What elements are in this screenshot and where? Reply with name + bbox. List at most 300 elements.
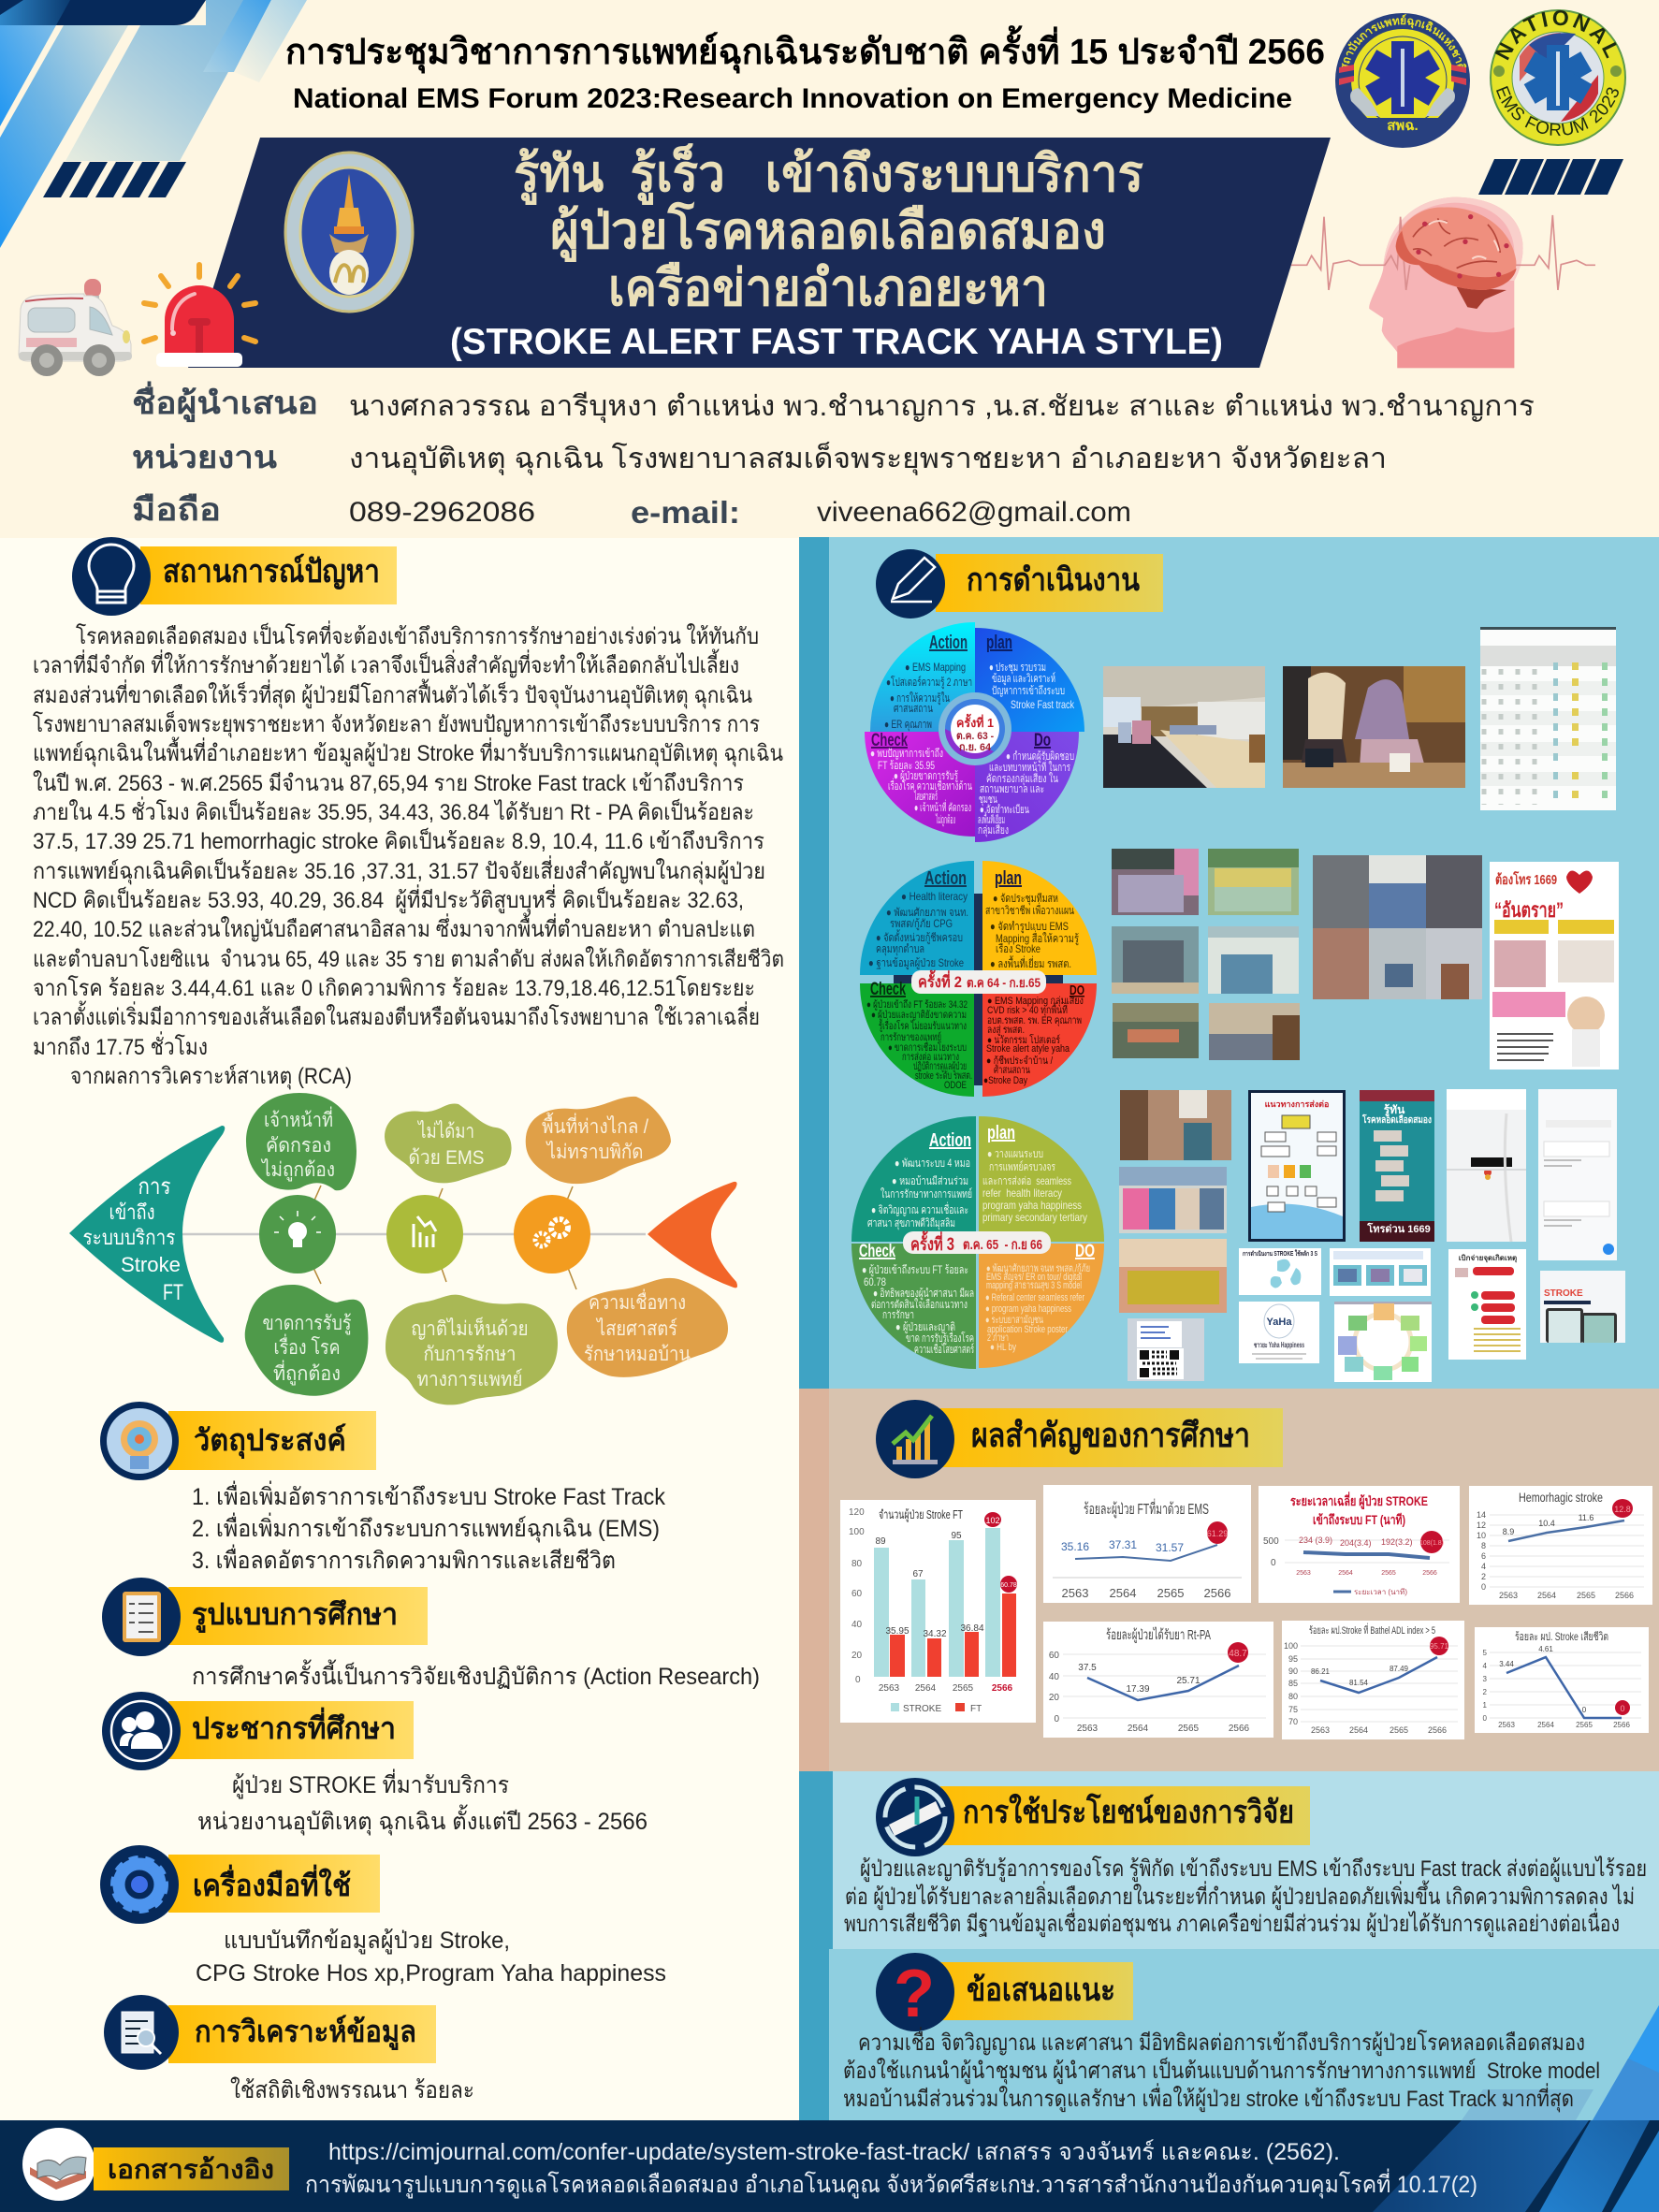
chart: percent FT via EMS: 2566 — [1204, 1586, 1230, 1600]
poster: hotline list: เบิกจ่ายจุดเกิดเหตุ — [1459, 1254, 1517, 1263]
panel: right column background — [799, 537, 1659, 2120]
fish head: FT — [163, 1280, 183, 1305]
Action quadrant text — [868, 868, 968, 970]
chart: hemorrhagic stroke: 8.9 — [1503, 1527, 1514, 1536]
Check quadrant text: ปฏิบัติการดูแลผู้ป่วย — [913, 1061, 967, 1072]
chart: Barthel ADL index: 70 — [1288, 1717, 1298, 1726]
chart: average time to FT: 2565 — [1381, 1570, 1396, 1577]
text block: situation paragraph: โรคหลอดเลือดสมอง เป็นโรคที่จะต้องเข้าถึงบริการการรักษาอย่างเร่งด่วน ให้ทันกับ — [76, 620, 759, 649]
chart: percent Rt-PA: 25.71 — [1176, 1676, 1201, 1686]
wheel center label: ครั้งที่ 3 — [910, 1230, 954, 1255]
Check quadrant text: การส่งต่อ แนวทาง — [902, 1052, 959, 1063]
chart: average time to FT: 192(3.2) — [1381, 1537, 1413, 1547]
node: light bulb — [259, 1195, 336, 1273]
Action quadrant text: ● ER คุณภาพ — [884, 718, 932, 732]
Check quadrant text: ไม่ถูกต้อง — [936, 813, 955, 827]
card: Yaha happiness: YaHa — [1267, 1317, 1292, 1328]
Plan quadrant text: ข้อมูล และวิเคราะห์ — [992, 672, 1055, 686]
Check quadrant text: ● ผู้ป่วยขาดการรับรู้ — [894, 769, 958, 783]
cause: remote area — [526, 1097, 671, 1184]
title banner — [188, 138, 1331, 368]
screenshot: map — [1447, 1089, 1526, 1242]
chart: stroke FT patient bars: 2563 — [879, 1683, 900, 1694]
Check quadrant text: รู้เรื่องโรค ไม่ยอมรับแนวทาง — [879, 1018, 967, 1032]
DO quadrant text: ● พัฒนาศักยภาพ จนท รพสต./กู้ภัย — [986, 1263, 1090, 1274]
DO quadrant text: ● program yaha happiness — [985, 1303, 1071, 1315]
DO quadrant text: CVD risk > 40 ทุกพื้นที่ — [987, 1002, 1068, 1016]
text block: situation paragraph — [33, 620, 784, 1090]
DO quadrant text: อบต.รพสต. รพ. ER คุณภาพ — [987, 1015, 1082, 1026]
cause: relatives disagree: กับการรักษา — [423, 1344, 517, 1365]
banner title line 3: เครือข่ายอำเภอยะหา — [608, 260, 1048, 316]
Action quadrant text: ● พัฒนศักยภาพ จนท. — [886, 906, 968, 919]
DO quadrant text: ● HL by — [990, 1342, 1016, 1353]
Plan quadrant text: refer health literacy — [982, 1186, 1062, 1200]
cause: lack of awareness: ขาดการรับรู้ — [262, 1313, 352, 1335]
cause: relatives disagree: ทางการแพทย์ — [417, 1368, 522, 1390]
chart: Barthel ADL index: 81.54 — [1349, 1679, 1369, 1687]
Action quadrant text: ●โปสเตอร์ความรู้ 2 ภาษา — [886, 676, 972, 690]
photo: meeting room — [1103, 666, 1265, 788]
chart: stroke FT patient bars: 2565 — [953, 1683, 974, 1694]
fish head — [69, 1126, 225, 1343]
section: tools heading: เครื่องมือที่ใช้ — [193, 1864, 351, 1902]
Check quadrant text: ต่อการตัดสินใจเลือกแนวทาง — [871, 1298, 968, 1311]
chart: percent FT via EMS: 61.29 — [1207, 1529, 1228, 1538]
section: recommendations heading: ข้อเสนอแนะ — [967, 1972, 1115, 2008]
cause: lack of awareness — [245, 1285, 368, 1396]
banner title English: (STROKE ALERT FAST TRACK YAHA STYLE) — [450, 322, 1223, 362]
chart: stroke FT patient bars: 2566 — [992, 1683, 1013, 1694]
photo grid: round 2 activities — [1112, 849, 1300, 1060]
text block: situation paragraph: ในปี พ.ศ. 2563 - พ.ศ.2565 มีจำนวน 87,65,94 ราย Stroke Fast track เข้าถึงบริการ — [33, 770, 744, 796]
chart: hemorrhagic stroke: 4 — [1481, 1562, 1486, 1571]
chart: average time to FT: 2563 — [1296, 1570, 1311, 1577]
Plan quadrant text — [986, 633, 1075, 711]
chart: average time to FT: ระยะเวลา (นาที) — [1354, 1588, 1407, 1596]
Plan quadrant text: primary secondary tertiary — [982, 1211, 1087, 1224]
chart: percent FT via EMS: 2564 — [1110, 1586, 1136, 1600]
chart: Barthel ADL index: 75 — [1288, 1705, 1298, 1714]
text block: population: หน่วยงานอุบัติเหตุ ฉุกเฉิน ตั้งแต่ปี 2563 - 2566 — [197, 1804, 648, 1836]
chart: stroke mortality — [1475, 1627, 1649, 1733]
text block: situation paragraph: และตำบลบาโงยซิแน จำนวน 65, 49 และ 35 ราย ตามลำดับ ส่งผลให้เกิดอัตราการเสียชีวิต — [33, 946, 784, 972]
infographic: 3S model: การดำเนินงาน STROKE ใช้หลัก 3 S — [1243, 1249, 1317, 1258]
chart: hemorrhagic stroke: 6 — [1481, 1551, 1486, 1561]
Check quadrant text: Check — [859, 1242, 895, 1261]
chart: percent Rt-PA: 48.7 — [1229, 1649, 1247, 1659]
icon: EMS forum 2023 logo — [1490, 9, 1626, 146]
chart: average time to FT: 0 — [1271, 1558, 1276, 1568]
text block: population — [197, 1768, 648, 1836]
Action quadrant text: ● การให้ความรู้ใน — [890, 691, 950, 706]
text block: situation paragraph: ภายใน 4.5 ชั่วโมง คิดเป็นร้อยละ 35.95, 34.43, 36.84 ได้รับยา Rt - PA คิดเป็นร้อยละ — [33, 796, 754, 825]
chart: hemorrhagic stroke: 11.6 — [1579, 1513, 1594, 1522]
section: population heading: ประชากรที่ศึกษา — [192, 1707, 396, 1745]
chart: stroke FT patient bars: 0 — [855, 1675, 861, 1685]
Do quadrant text: กลุ่มเสี่ยง — [978, 822, 1009, 837]
text block: situation paragraph: จากผลการวิเคราะห์สาเหตุ (RCA) — [70, 1063, 352, 1090]
text block: situation paragraph: สมองส่วนที่ขาดเลือดให้เร็วที่สุด ผู้ป่วยมีโอกาสฟื้นตัวได้เร็ว ปัจจุบันงานอุบัติเหตุ ฉุกเฉิน — [33, 678, 752, 709]
chart: percent FT via EMS — [1043, 1485, 1251, 1603]
Do quadrant text: คัดกรองกลุ่มเสี่ยง ใน — [986, 770, 1058, 786]
Action quadrant text: ● จัดตั้งหน่วยกู้ชีพครอบ — [876, 929, 963, 945]
Check quadrant text — [866, 980, 972, 1091]
chart: average time to FT: 108(1.8) — [1419, 1540, 1444, 1547]
chart: stroke FT patient bars — [840, 1500, 1036, 1723]
chart: stroke FT patient bars: 36.84 — [960, 1623, 984, 1634]
section: research utilization heading: การใช้ประโยชน์ของการวิจัย — [963, 1793, 1294, 1830]
section: objectives heading: วัตถุประสงค์ — [194, 1423, 346, 1460]
chart: stroke mortality: 4.61 — [1538, 1645, 1553, 1653]
chart: Barthel ADL index: 100 — [1284, 1641, 1298, 1651]
chart: stroke mortality: 5 — [1483, 1649, 1488, 1657]
chart: stroke mortality: 2 — [1483, 1688, 1488, 1696]
Check quadrant text — [870, 731, 972, 827]
text block: situation paragraph: แพทย์ฉุกเฉินในพื้นที่อำเภอยะหา ข้อมูลผู้ป่วย Stroke ที่มารับบริการแผนกอุบัติเหตุ ฉุกเฉิน — [33, 736, 783, 767]
chart: percent Rt-PA: 2566 — [1229, 1724, 1250, 1734]
DO quadrant text: Stroke alert atyle yaha — [986, 1043, 1070, 1055]
DO quadrant text: EMS สัญจร/ ER on tour/ digital — [986, 1272, 1082, 1283]
chart: average time to FT: 2564 — [1338, 1570, 1353, 1577]
DO quadrant text: ● ระบบยาสามัญชน — [985, 1315, 1043, 1326]
text block: population: ผู้ป่วย STROKE ที่มารับบริการ — [232, 1768, 509, 1799]
chart: hemorrhagic stroke: 2566 — [1615, 1591, 1634, 1600]
Check quadrant text: ● อิทธิพลของผู้นำศาสนา มีผล — [873, 1287, 974, 1301]
cause: staff triage: ไม่ถูกต้อง — [260, 1158, 335, 1182]
icon: red siren — [144, 265, 255, 367]
DO quadrant text: 2 ภาษา — [987, 1332, 1009, 1344]
unit value: งานอุบัติเหตุ ฉุกเฉิน โรงพยาบาลสมเด็จพระยุพราชยะหา อำเภอยะหา จังหวัดยะลา — [349, 441, 1387, 476]
fish tail — [648, 1182, 737, 1288]
email value: viveena662@gmail.com — [817, 497, 1131, 528]
chart: stroke FT patient bars: 34.32 — [923, 1629, 947, 1639]
Check quadrant text: 60.78 — [864, 1275, 886, 1288]
text block: objectives list — [192, 1480, 665, 1574]
section: key results heading: ผลสำคัญของการศึกษา — [971, 1416, 1250, 1455]
card: Yaha happiness: ชาวยะ Yaha Happiness — [1254, 1341, 1304, 1349]
Check quadrant text: ODOE — [944, 1080, 967, 1091]
wheel center label: ต.ค. 65 - ก.ย 66 — [963, 1237, 1042, 1253]
Do quadrant text: และบทบาทหน้าที่ ในการ — [989, 759, 1070, 774]
photo: health screening — [1283, 666, 1465, 788]
chart: hemorrhagic stroke: 10.4 — [1538, 1519, 1555, 1528]
Check quadrant text: ● พบปัญหาการเข้าถึง — [870, 747, 943, 760]
text block: tools: แบบบันทึกข้อมูลผู้ป่วย Stroke, — [224, 1928, 510, 1955]
poster: stroke awareness — [1360, 1090, 1434, 1242]
DO quadrant text: ● กู้ชีพประจำบ้าน / — [986, 1055, 1054, 1067]
section: methods heading: การดำเนินงาน — [967, 562, 1140, 598]
decoration: left hatch — [43, 162, 186, 197]
Action quadrant text: ● พัฒนาระบบ 4 หมอ — [895, 1157, 970, 1170]
text block: situation paragraph: 37.5, 17.39 25.71 hemorrhagic stroke คิดเป็นร้อยละ 8.9, 10.4, 11.6 เข้าถึงบริการ — [33, 827, 764, 854]
DO quadrant text: ศาสนสถาน — [994, 1065, 1030, 1076]
poster: stroke awareness: รู้ทัน — [1384, 1103, 1405, 1117]
wheel center label: ต.ค 64 - ก.ย.65 — [967, 975, 1041, 990]
cause: relatives disagree — [386, 1295, 558, 1404]
Plan quadrant text: ปัญหาการเข้าถึงระบบ — [992, 684, 1065, 697]
DO quadrant text: ลงสู่ รพสต. — [987, 1025, 1025, 1036]
chart: Barthel ADL index: 2565 — [1390, 1725, 1408, 1735]
Check quadrant text — [859, 1242, 974, 1356]
Plan quadrant text — [985, 868, 1079, 970]
node: chart — [386, 1195, 463, 1273]
chart: stroke FT patient bars: 95 — [951, 1531, 962, 1541]
chart: PDCA wheel round 1 — [865, 622, 1084, 842]
DO quadrant text: mapping สาธารณสุข 3 S model — [986, 1280, 1082, 1291]
cause: remote area: พื้นที่ห่างไกล / — [542, 1113, 648, 1138]
chart: hemorrhagic stroke: 12 — [1477, 1521, 1486, 1530]
chart: stroke FT patient bars: 67 — [912, 1569, 924, 1579]
conference title English: National EMS Forum 2023:Research Innovation on Emergency Medicine — [293, 83, 1292, 114]
section: situation heading — [72, 537, 397, 616]
Plan quadrant text: ● ลงพื้นที่เยี่ยม รพสต. — [990, 955, 1071, 970]
chart: percent Rt-PA: 0 — [1054, 1714, 1059, 1724]
text block: situation paragraph: จากโรค ร้อยละ 3.44,4.61 และ 0 เกิดความพิการ ร้อยละ 13.79,18.46,12.51โดยระยะ — [33, 975, 755, 1001]
chart: percent FT via EMS: ร้อยละผู้ป่วย FTที่มาด้วย EMS — [1084, 1498, 1209, 1519]
screenshot: computers — [1330, 1248, 1431, 1296]
section: research utilization heading — [876, 1778, 1310, 1856]
Action quadrant text: ● จิตวิญญาณ ความเชื่อและ — [871, 1201, 968, 1216]
Action quadrant text: ● ฐานข้อมูลผู้ป่วย Stroke — [868, 956, 964, 970]
Action quadrant text: ● หมอบ้านมีส่วนร่วม — [892, 1174, 968, 1187]
DO quadrant text: ● Referal center seamless refer — [985, 1292, 1084, 1303]
Action quadrant text: Action — [929, 1130, 971, 1151]
references heading — [94, 2147, 289, 2190]
cause: beliefs: ไสยศาสตร์ — [595, 1317, 677, 1340]
chart: Barthel ADL index: ร้อยละ ผป.Stroke ที่ Bathel ADL index > 5 — [1309, 1623, 1435, 1637]
mobile label: มือถือ — [132, 492, 221, 527]
chart: Barthel ADL index: 2564 — [1349, 1725, 1368, 1735]
Check quadrant text: ● ผู้ป่วยและญาติ — [895, 1320, 955, 1334]
Check quadrant text: ● ผู้ป่วยเข้าถึง FT ร้อยละ 34.32 — [866, 999, 968, 1011]
fishbone spine — [182, 1233, 646, 1235]
chart: percent FT via EMS: 31.57 — [1156, 1541, 1184, 1554]
cause: beliefs: ความเชื่อทาง — [589, 1288, 686, 1314]
Plan quadrant text — [982, 1123, 1087, 1224]
DO quadrant text: DO — [1075, 1242, 1095, 1261]
cause: not via EMS: ด้วย EMS — [408, 1147, 485, 1169]
chart: stroke FT patient bars: FT — [970, 1704, 982, 1714]
DO quadrant text — [985, 1242, 1095, 1353]
icon: EMS forum 2023 logo: NATIONAL — [1495, 9, 1617, 60]
chart: Barthel ADL index: 87.49 — [1390, 1665, 1409, 1673]
cause: not via EMS: ไม่ได้มา — [416, 1120, 474, 1142]
chart: Barthel ADL index: 95 — [1288, 1654, 1298, 1664]
Action quadrant text: ● EMS Mapping — [905, 661, 966, 674]
diagram: care cycle — [1334, 1302, 1432, 1382]
chart: PDCA wheel round 2 — [860, 861, 1097, 1097]
chart: PDCA wheel round 3 — [851, 1116, 1104, 1369]
text block: recommendations — [843, 2027, 1600, 2113]
chart: stroke FT patient bars: จำนวนผู้ป่วย Stroke FT — [879, 1507, 963, 1522]
chart: Barthel ADL index: 85 — [1288, 1679, 1298, 1688]
Check quadrant text: การรักษา — [882, 1308, 914, 1321]
fish head: Stroke — [121, 1253, 181, 1276]
header background — [0, 0, 1659, 538]
chart: stroke FT patient bars: 40 — [851, 1620, 863, 1630]
Action quadrant text: Action — [929, 633, 968, 653]
section: key results heading — [876, 1400, 1283, 1478]
cause: remote area: ไม่ทราบพิกัด — [546, 1141, 644, 1163]
chart: stroke FT patient bars: 120 — [849, 1507, 865, 1518]
chart: stroke mortality: 2566 — [1613, 1721, 1630, 1729]
text block: tools — [196, 1928, 666, 1986]
Plan quadrant text: ● วางแผนระบบ — [987, 1147, 1043, 1160]
chart: stroke FT patient bars: 89 — [875, 1536, 886, 1547]
chart: percent Rt-PA: 2564 — [1128, 1724, 1149, 1734]
Plan quadrant text: และการส่งต่อ seamless — [982, 1174, 1071, 1187]
chart: Barthel ADL index — [1282, 1621, 1464, 1739]
fish head: การ — [138, 1174, 171, 1200]
screenshot: website stroke — [1540, 1271, 1625, 1343]
Plan quadrant text: สาขาวิชาชีพ เพื่อวางแผน — [985, 902, 1074, 917]
banner title line 2: ผู้ป่วยโรคหลอดเลือดสมอง — [550, 201, 1106, 262]
text block: references: การพัฒนารูปแบบการดูแลโรคหลอดเลือดสมอง อำเภอโนนคูณ จังหวัดศรีสะเกษ.วารสารสำนักงานป้องกันควบคุมโรคที่ 10.17(2) — [305, 2168, 1477, 2199]
chart: stroke mortality: 0 — [1483, 1714, 1488, 1723]
Do quadrant text: ลงพื้นที่เยี่ยม — [978, 811, 1005, 826]
chart: hemorrhagic stroke: 0 — [1481, 1582, 1486, 1592]
icon: national institute logo: สถาบันการแพทย์ฉุกเฉินแห่งชาติ — [1342, 14, 1467, 67]
chart: stroke FT patient bars: 102 — [985, 1516, 1000, 1525]
Plan quadrant text: Stroke Fast track — [1011, 698, 1075, 711]
chart: average time to FT: 500 — [1263, 1536, 1279, 1547]
Plan quadrant text: Mapping สื่อให้ความรู้ — [996, 930, 1079, 946]
Do quadrant text: Do — [1034, 731, 1051, 750]
cause: staff triage — [246, 1093, 357, 1190]
Action quadrant text — [884, 633, 972, 732]
icon: national institute logo: สพฉ. — [1387, 118, 1419, 134]
section: recommendations heading — [876, 1953, 1133, 2031]
chart: percent Rt-PA: 2565 — [1178, 1724, 1200, 1734]
decoration: bottom-right blue shapes — [1462, 2005, 1659, 2120]
Check quadrant text: ไสยศาสตร์ — [914, 790, 938, 803]
text block: situation paragraph: NCD คิดเป็นร้อยละ 53.93, 40.29, 36.84 ผู้ที่มีประวัติสูบบุหรี่ คิดเป็นร้อยละ 32.63, — [33, 884, 744, 914]
wheel center label: ครั้งที่ 2 — [918, 969, 962, 991]
photo: QR code message — [1128, 1318, 1204, 1381]
chart: fishbone root cause diagram — [69, 1093, 737, 1404]
DO quadrant text: ● นวัตกรรม โปสเตอร์ — [987, 1033, 1060, 1046]
chart: percent FT via EMS: 37.31 — [1109, 1538, 1137, 1551]
Check quadrant text: ● ขาดการเชื่อมโยงระบบ — [888, 1040, 967, 1054]
chart: stroke mortality: 1 — [1483, 1701, 1488, 1710]
cause: not via EMS — [385, 1104, 512, 1183]
text block: objectives list: 3. เพื่อลดอัตราการเกิดความพิการและเสียชีวิต — [192, 1544, 616, 1574]
Plan quadrant text: ● จัดทำรูปแบบ EMS — [990, 920, 1069, 934]
section: tools heading — [100, 1845, 380, 1924]
chart: Barthel ADL index: 2566 — [1428, 1725, 1447, 1735]
footer band — [0, 2120, 1659, 2212]
section: methods heading — [876, 549, 1163, 618]
chart: stroke mortality: 2563 — [1498, 1721, 1515, 1729]
DO quadrant text: DO — [1070, 982, 1084, 998]
chart: percent FT via EMS: 35.16 — [1061, 1540, 1089, 1553]
Check quadrant text: ● ผู้ป่วยและญาติยังขาดความ — [871, 1010, 967, 1021]
text block: references: https://cimjournal.com/confer-update/system-stroke-fast-track/ เสกสรร จวงจันทร์ และคณะ. (2562). — [328, 2139, 1340, 2165]
screenshot: website stroke: STROKE — [1544, 1288, 1583, 1299]
DO quadrant text: ● EMS Mapping กลุ่มเสี่ยง — [987, 993, 1084, 1007]
wheel center label — [956, 713, 994, 753]
Plan quadrant text: เรื่อง Stroke — [996, 940, 1041, 955]
cause: staff triage: คัดกรอง — [266, 1135, 331, 1157]
chart: hemorrhagic stroke: 14 — [1477, 1510, 1486, 1520]
section: analysis heading — [104, 1995, 436, 2070]
Action quadrant text: Action — [924, 868, 967, 889]
Plan quadrant text: plan — [987, 1123, 1015, 1143]
references heading: เอกสารอ้างอิง — [108, 2155, 274, 2184]
chart: hemorrhagic stroke: 2563 — [1499, 1591, 1518, 1600]
chart: percent Rt-PA: 20 — [1049, 1693, 1059, 1703]
chart: hemorrhagic stroke: 10 — [1477, 1531, 1486, 1540]
chart: stroke FT patient bars: 20 — [851, 1651, 863, 1661]
Plan quadrant text: plan — [986, 633, 1012, 653]
text block: situation paragraph: เวลาตั้งแต่เริ่มมีอาการของเส้นเลือดในสมองตีบหรือตันจนมาถึงโรงพยาบาล ใช้เวลาเฉลี่ย — [33, 1000, 760, 1030]
chart: hemorrhagic stroke — [1469, 1486, 1652, 1605]
section: study design heading — [102, 1578, 428, 1656]
text block: situation paragraph: 22.40, 10.52 และส่วนใหญ่นับถือศาสนาอิสลาม ซึ่งมาจากพื้นที่ตำบลยะหา ตำบลปะแต — [33, 912, 755, 942]
poster: flow chart — [1248, 1090, 1346, 1242]
text block: situation paragraph: มากถึง 17.75 ชั่วโมง — [33, 1031, 208, 1060]
chart: average time to FT: เข้าถึงระบบ FT (นาที) — [1313, 1512, 1405, 1527]
chart: hemorrhagic stroke: 12.8 — [1614, 1505, 1631, 1514]
poster: flow chart: แนวทางการส่งต่อ — [1265, 1099, 1329, 1109]
poster: call 1669: “อันตราย” — [1494, 898, 1564, 922]
banner title line 1: รู้ทัน รู้เร็ว เข้าถึงระบบบริการ — [514, 144, 1143, 205]
chart: hemorrhagic stroke: 2 — [1481, 1572, 1486, 1581]
wheel center label — [903, 1230, 1051, 1255]
text block: objectives list: 2. เพื่อเพิ่มการเข้าถึงระบบการแพทย์ฉุกเฉิน (EMS) — [192, 1512, 660, 1543]
presenter label: ชื่อผู้นำเสนอ — [132, 381, 318, 423]
fish head: เข้าถึง — [109, 1201, 155, 1224]
conference title Thai: การประชุมวิชาการการแพทย์ฉุกเฉินระดับชาติ ครั้งที่ 15 ประจำปี 2566 — [285, 25, 1325, 74]
Action quadrant text: ศาสนา สุขภาพดีวิถีมุสลิม — [867, 1216, 955, 1230]
screenshot: chat — [1538, 1089, 1617, 1260]
text block: situation paragraph: โรงพยาบาลสมเด็จพระยุพราชยะหา จังหวัดยะลา ยังพบปัญหาการเข้าถึงระบบบริการ การ — [33, 710, 760, 738]
chart: stroke FT patient bars: 80 — [851, 1559, 863, 1569]
chart: hemorrhagic stroke: 8 — [1481, 1541, 1486, 1550]
chart: percent Rt-PA: 37.5 — [1078, 1663, 1097, 1673]
chart: average time to FT: 234 (3.9) — [1299, 1535, 1332, 1545]
Check quadrant text: Check — [871, 731, 908, 750]
email label: e-mail: — [631, 495, 740, 530]
Plan quadrant text: program yaha happiness — [982, 1199, 1082, 1212]
Do quadrant text — [978, 731, 1074, 837]
icon: national institute logo — [1335, 13, 1470, 148]
unit label: หน่วยงาน — [132, 440, 277, 474]
mobile value: 089-2962086 — [349, 497, 535, 528]
Do quadrant text: ชุมชน — [979, 793, 997, 807]
text block: situation paragraph: เวลาที่มีจำกัด ที่ให้การรักษาด้วยยาได้ เวลาจึงเป็นสิ่งสำคัญที่จะทำให้เลือดกลับไปเลี้ยง — [33, 648, 739, 678]
chart: hemorrhagic stroke: 2564 — [1537, 1591, 1556, 1600]
wheel center label — [911, 969, 1046, 994]
chart: stroke FT patient bars: 60 — [851, 1589, 863, 1599]
Plan quadrant text: ● จัดประชุมทีมสห — [993, 892, 1058, 906]
chart: Barthel ADL index: 86.21 — [1311, 1667, 1331, 1676]
Check quadrant text: ขาด การรับรู้เรื่องโรค — [906, 1330, 974, 1346]
Check quadrant text: Check — [870, 980, 906, 999]
chart: stroke mortality: 3 — [1483, 1675, 1488, 1683]
icon: books — [22, 2128, 95, 2201]
section: analysis heading: การวิเคราะห์ข้อมูล — [195, 2015, 416, 2051]
Plan quadrant text: ● ประชุม รวบรวม — [989, 661, 1046, 675]
Do quadrant text: สถานพยาบาล และ — [980, 782, 1044, 795]
Check quadrant text: FT ร้อยละ 35.95 — [878, 759, 935, 772]
chart: Barthel ADL index: 80 — [1288, 1692, 1298, 1701]
cause: lack of awareness: เรื่อง โรค — [273, 1333, 341, 1359]
DO quadrant text: application Stroke poster — [987, 1324, 1068, 1335]
card: Yaha happiness — [1239, 1302, 1319, 1363]
decoration: right hatch — [1478, 159, 1623, 195]
